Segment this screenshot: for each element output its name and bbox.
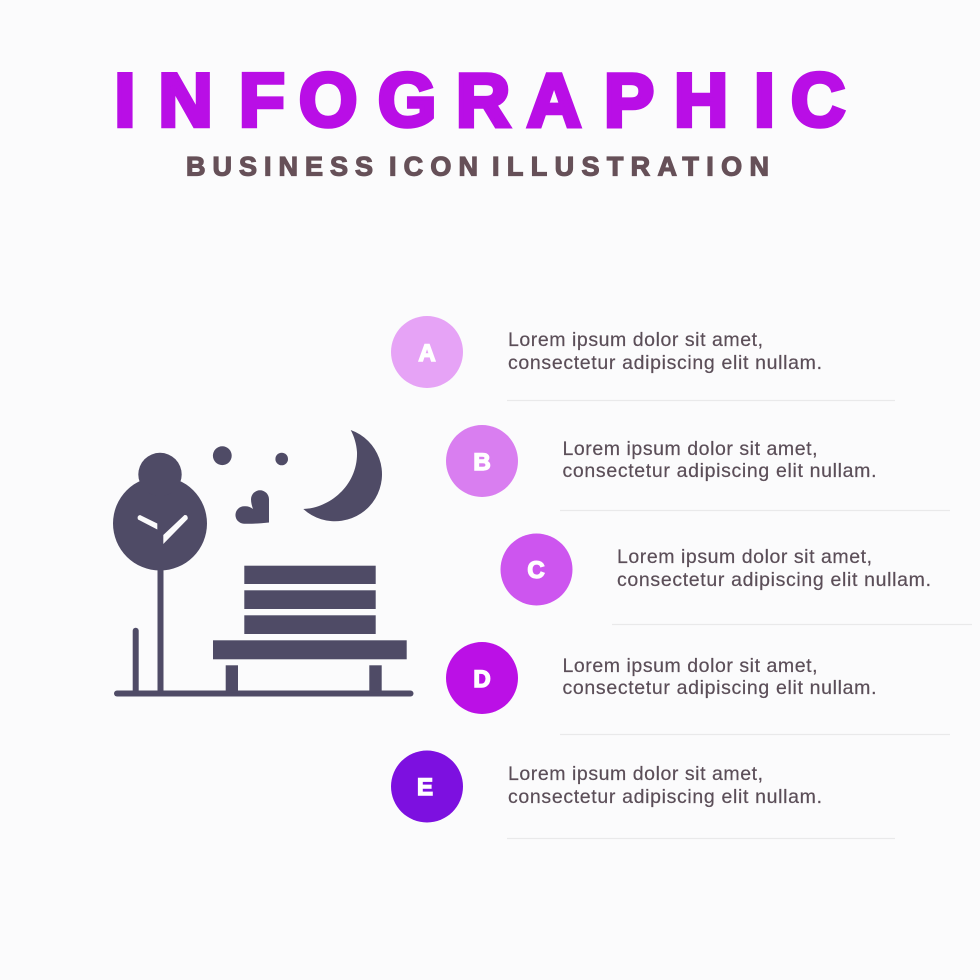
icon: heart — [235, 490, 269, 524]
step A — [391, 316, 895, 400]
circle B — [446, 425, 518, 497]
text A: consectetur adipiscing elit nullam. — [508, 352, 822, 374]
icon: large dot — [213, 446, 232, 465]
text E — [508, 763, 822, 808]
circle E: E — [417, 774, 433, 801]
text B: consectetur adipiscing elit nullam. — [562, 460, 876, 482]
step D — [446, 642, 950, 734]
subtitle — [186, 152, 769, 182]
text C: Lorem ipsum dolor sit amet, — [617, 546, 872, 568]
circle D — [446, 642, 518, 714]
subtitle: ILLUSTRATION — [492, 152, 769, 182]
icon: small post — [133, 628, 139, 692]
icon: ground line — [114, 690, 414, 696]
subtitle: ICON — [389, 152, 478, 182]
step B — [446, 425, 950, 510]
circle E — [391, 750, 463, 822]
circle A: A — [418, 340, 436, 367]
text B — [562, 438, 876, 482]
icon: tree — [113, 453, 207, 692]
text A: Lorem ipsum dolor sit amet, — [508, 329, 763, 351]
circle A — [391, 316, 463, 388]
circle D: D — [473, 666, 491, 693]
circle C: C — [527, 557, 545, 584]
circle C — [500, 534, 572, 606]
text C: consectetur adipiscing elit nullam. — [617, 569, 931, 591]
text C — [617, 546, 931, 591]
icon: small dot — [275, 453, 288, 465]
title: INFOGRAPHIC — [114, 58, 845, 142]
icon: crescent moon — [303, 430, 382, 521]
text D: consectetur adipiscing elit nullam. — [562, 677, 876, 699]
text A — [508, 329, 822, 374]
step E — [391, 750, 895, 838]
icon: bench — [213, 566, 407, 692]
text E: Lorem ipsum dolor sit amet, — [508, 763, 763, 785]
text B: Lorem ipsum dolor sit amet, — [562, 438, 818, 460]
circle B: B — [473, 449, 491, 476]
text D: Lorem ipsum dolor sit amet, — [562, 655, 818, 677]
text D — [562, 655, 876, 699]
step C — [500, 534, 972, 624]
icon: park bench at night — [113, 430, 414, 696]
text E: consectetur adipiscing elit nullam. — [508, 786, 822, 808]
subtitle: BUSINESS — [186, 152, 373, 182]
